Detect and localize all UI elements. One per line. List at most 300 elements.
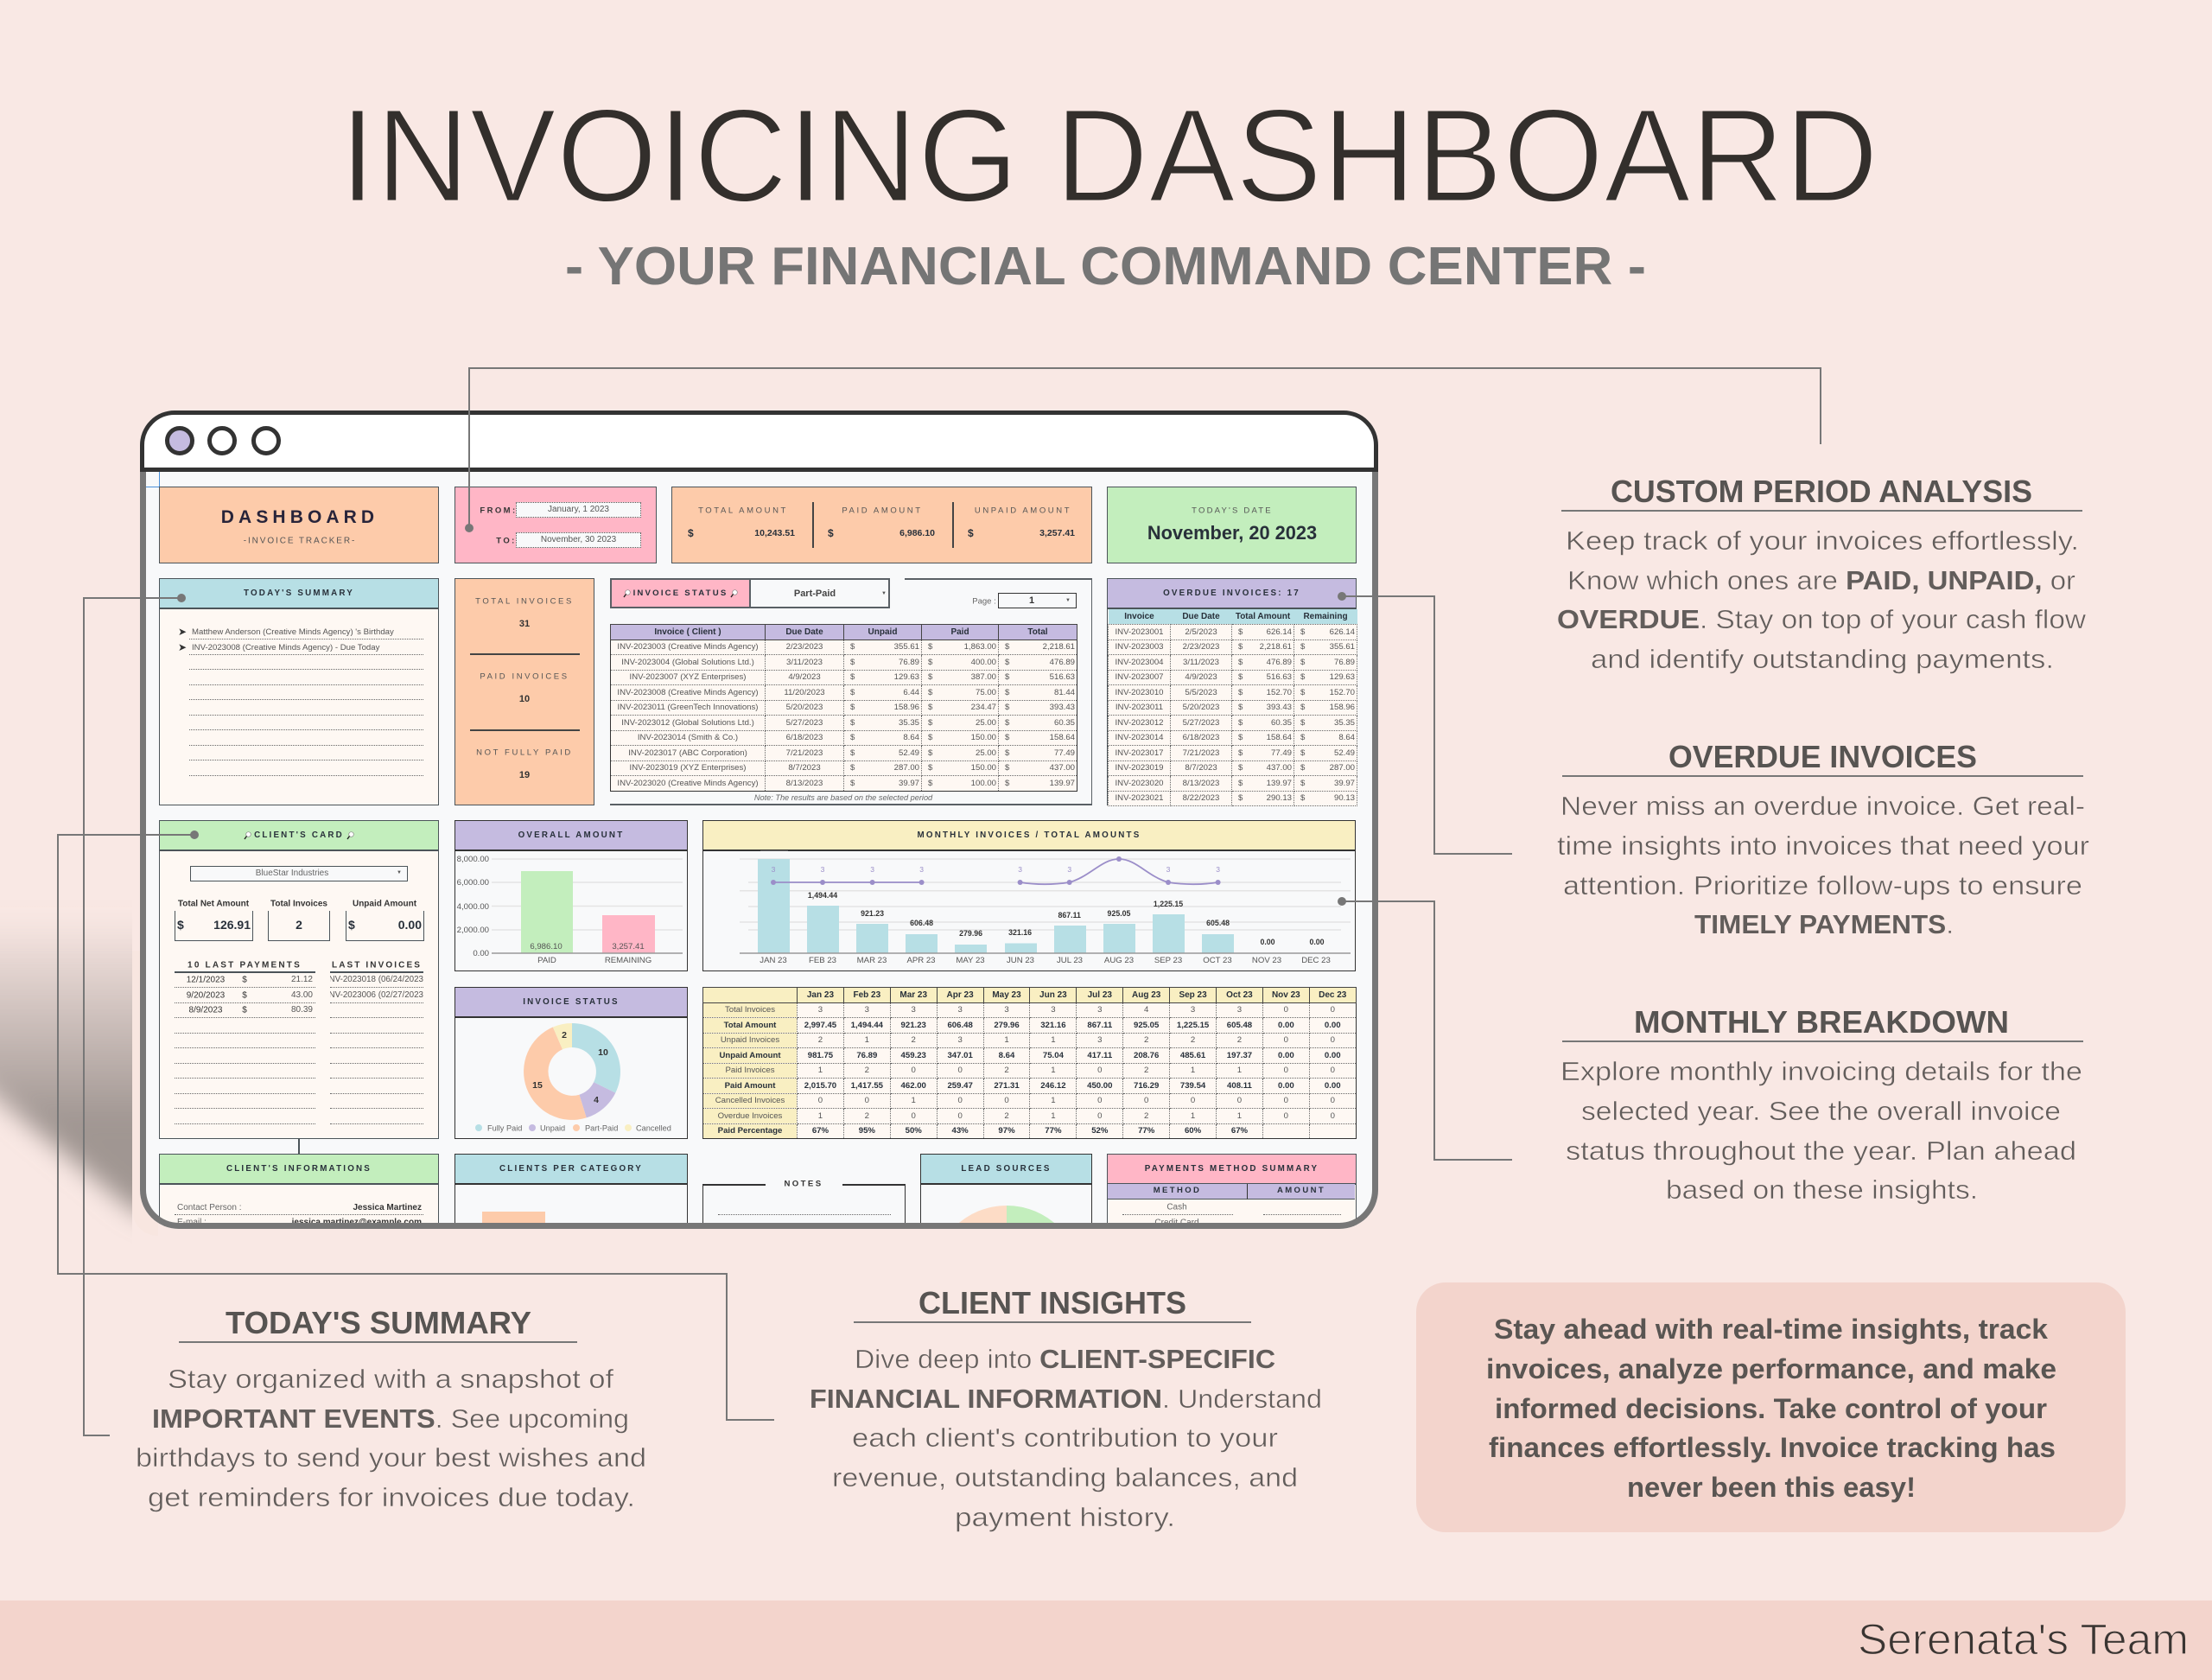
monthly breakdown table: 1 [912,1096,916,1105]
text block: monthly breakdown: Explore monthly invoicing details for the [1560,1056,2082,1086]
overdue table: $ [1300,748,1305,758]
invoice table: 8/7/2023 [788,763,821,773]
panel: dashboard title [159,487,439,563]
overdue header [1108,579,1356,609]
not fully paid: NOT FULLY PAID [476,748,573,757]
invoice table: 387.00 [971,672,996,682]
unpaid value: $ [968,527,974,539]
subtitle: invoice tracker: -INVOICE TRACKER- [244,536,356,546]
monthly breakdown table: 1 [818,1111,823,1121]
text block: monthly breakdown: selected year. See the overall invoice [1581,1096,2061,1126]
invoice table: 39.97 [899,779,919,788]
combo chart: monthly invoices: APR 23 [906,956,935,964]
donut header [455,988,687,1018]
overdue table: $ [1238,763,1243,773]
panel: payments method summary [1107,1154,1357,1249]
text block: client insights: Dive deep into CLIENT-SPECIFIC [855,1344,1275,1374]
monthly breakdown table: 321.16 [1040,1021,1066,1030]
invoice table: 158.64 [1050,733,1075,742]
overdue table: 3/11/2023 [1183,658,1219,667]
overdue table: $ [1300,627,1305,637]
monthly breakdown table: Overdue Invoices [718,1111,782,1121]
overdue table: 60.35 [1271,718,1292,728]
amount column header: AMOUNT [1277,1186,1325,1194]
panel: client's informations [159,1154,439,1249]
total value: 10,243.51 [754,528,795,538]
panel: notes [702,1184,906,1244]
invoice table: INV-2023020 (Creative Minds Agency) [617,779,759,788]
invoice table: $ [928,642,932,652]
text block: overdue invoices [1557,739,2089,939]
monthly breakdown table: 97% [998,1126,1015,1136]
invoice table: 8/13/2023 [786,779,823,788]
summary header: TODAY'S SUMMARY [244,589,354,598]
overall header [455,821,687,851]
callout: finances effortlessly. Invoice tracking has [1489,1432,2056,1463]
monthly breakdown table: 1 [1237,1066,1242,1075]
overdue table: 290.13 [1267,793,1292,803]
combo chart: monthly invoices: 3 [870,864,874,873]
paid value: 6,986.10 [899,528,935,538]
heading: dashboard: DASHBOARD [221,507,378,527]
monthly breakdown table: Oct 23 [1226,990,1253,1000]
footer band [0,1600,2212,1680]
monthly breakdown table: 0.00 [1325,1081,1341,1091]
invoice table: 150.00 [971,763,996,773]
text block: monthly breakdown: MONTHLY BREAKDOWN [1634,1004,2009,1040]
overdue table: $ [1300,658,1305,667]
invoice table: $ [1005,779,1009,788]
amount column header [1248,1184,1355,1200]
summary items [178,626,423,776]
window halo [132,951,158,1236]
monthly breakdown table: 77% [1045,1126,1061,1136]
invoice table: 77.49 [1054,748,1075,758]
total amount: TOTAL AMOUNT [698,506,788,515]
overdue table: $ [1238,658,1243,667]
10 last payments: 9/20/2023 [187,990,225,1001]
donut header: INVOICE STATUS [523,997,620,1007]
invoice table: 11/20/2023 [784,688,825,697]
overdue table: 7/21/2023 [1183,748,1219,758]
overdue table: $ [1238,733,1243,742]
summary items: INV-2023008 (Creative Minds Agency) - Due Today [192,643,379,652]
invoice table: 7/21/2023 [786,748,823,758]
overdue table: Remaining [1303,612,1348,621]
text block: client insights: revenue, outstanding balances, and [832,1462,1298,1492]
total invoices [268,899,330,941]
monthly breakdown table: 3 [1051,1005,1056,1015]
overdue table: $ [1238,779,1243,788]
monthly breakdown table: 1,225.15 [1177,1021,1209,1030]
monthly breakdown table: 1 [865,1035,869,1045]
monthly breakdown table: 0 [1331,1111,1335,1121]
overdue table: 129.63 [1330,672,1355,682]
monthly breakdown table: Jul 23 [1088,990,1112,1000]
monthly breakdown table: 60% [1185,1126,1201,1136]
text block: overdue invoices: OVERDUE INVOICES [1669,739,1977,774]
selected cell marker [145,472,160,487]
invoice table: 2,218.61 [1043,642,1075,652]
invoice table: $ [1005,642,1009,652]
combo chart: monthly invoices: OCT 23 [1203,956,1231,964]
invoice table: 75.00 [976,688,996,697]
combo chart: monthly invoices: 279.96 [959,928,982,937]
monthly breakdown table: Feb 23 [853,990,880,1000]
not fully paid value: 19 [519,770,530,780]
card header: CLIENT'S CARD [254,830,344,840]
invoice table: 35.35 [899,718,919,728]
panel: today's date [1107,487,1357,563]
overdue table: INV-2023014 [1115,733,1163,742]
overdue table: 77.49 [1271,748,1292,758]
overdue table: 393.43 [1267,703,1292,712]
overdue table: 39.97 [1334,779,1355,788]
invoice table: 6.44 [903,688,919,697]
shadow behind the window [0,935,132,1226]
window frame: content border [140,449,1378,1229]
monthly breakdown table: 0 [957,1066,963,1075]
combo chart: monthly invoices: AUG 23 [1103,956,1134,964]
panel: invoice status donut [454,987,688,1139]
combo chart: monthly invoices [740,850,1351,964]
text block: custom period analysis: Know which ones are PAID, UNPAID, or [1567,565,2075,595]
overdue table: $ [1238,748,1243,758]
overdue header: OVERDUE INVOICES: 17 [1163,589,1300,598]
monthly breakdown table: 3 [1097,1005,1102,1015]
page selector: Page : [972,596,996,607]
combo chart: monthly invoices: 606.48 [910,918,933,926]
invoice table: INV-2023003 (Creative Minds Agency) [617,642,759,652]
overdue table: Due Date [1182,612,1220,621]
overdue table: 5/20/2023 [1183,703,1219,712]
overdue table: 8/22/2023 [1183,793,1219,803]
invoice table: $ [1005,748,1009,758]
monthly breakdown table: Nov 23 [1272,990,1300,1000]
lead header: LEAD SOURCES [961,1164,1052,1174]
monthly breakdown table: 2 [1004,1066,1009,1075]
invoice table: $ [850,703,855,712]
contact person row [177,1203,422,1212]
text block: today's summary: TODAY'S SUMMARY [226,1305,531,1340]
10 last payments: 43.00 [291,990,313,1000]
text block: monthly breakdown: based on these insights. [1666,1174,1978,1205]
connector: overdue invoices [1338,593,1512,854]
category header: CLIENTS PER CATEGORY [499,1164,643,1174]
monthly breakdown table: 3 [1004,1005,1009,1015]
e-mail row [177,1218,422,1227]
from date [516,502,641,518]
combo chart: monthly invoices: 3 [820,864,824,873]
bar chart: overall amount: 2,000.00 [456,925,489,935]
combo chart: monthly invoices: 321.16 [1008,928,1032,937]
text block: custom period analysis: Keep track of your invoices effortlessly. [1566,525,2079,556]
donut chart: Fully Paid [487,1123,522,1132]
overdue table: 626.14 [1330,627,1355,637]
monthly breakdown table: 3 [1097,1035,1102,1045]
invoice table: Invoice ( Client ) [654,627,721,637]
monthly breakdown table: 3 [1191,1005,1195,1015]
monthly header: MONTHLY INVOICES / TOTAL AMOUNTS [918,830,1141,840]
monthly breakdown table: 1 [1051,1096,1056,1105]
panel: clients per category [454,1154,688,1249]
monthly breakdown table: 2 [912,1035,916,1045]
notes label: NOTES [784,1179,823,1189]
monthly breakdown table: 2 [1191,1035,1195,1045]
invoice table: $ [928,748,932,758]
invoice table: $ [928,733,932,742]
monthly breakdown table: 0 [1097,1066,1102,1075]
monthly breakdown table: 1,417.55 [851,1081,883,1091]
panel: invoice status list: 1 [1029,595,1034,606]
panel: invoice counts [454,578,594,805]
text block: overdue invoices: Never miss an overdue invoice. Get real- [1560,791,2085,821]
invoice table: 8.64 [903,733,919,742]
overall header: OVERALL AMOUNT [518,830,624,840]
combo chart: monthly invoices: 3 [771,864,775,873]
date value: November, 20 2023 [1147,522,1317,544]
invoice table: $ [1005,718,1009,728]
total net amount [175,899,253,941]
text block: overdue invoices: attention. Prioritize follow-ups to ensure [1563,870,2082,900]
invoice table: INV-2023011 (GreenTech Innovations) [617,703,759,712]
note: Note: The results are based on the selected period [754,793,932,802]
overdue table: $ [1238,703,1243,712]
monthly breakdown table: 0 [1237,1096,1242,1105]
panel: amounts [671,487,1092,563]
overdue table: Total Amount [1236,612,1290,621]
overdue table: INV-2023001 [1115,627,1163,637]
credit card row: Credit Card [1154,1219,1199,1227]
monthly breakdown table: 2 [1144,1111,1148,1121]
callout: informed decisions. Take control of your [1495,1393,2047,1424]
last invoices [330,961,423,1124]
overdue table: 5/27/2023 [1183,718,1219,728]
overdue table: INV-2023021 [1115,793,1163,803]
donut chart: 4 [594,1094,599,1104]
overdue table: 2/5/2023 [1185,627,1217,637]
10 last payments [175,961,315,1124]
monthly breakdown table: 867.11 [1087,1021,1112,1030]
text block: today's summary [136,1305,646,1512]
invoice table: $ [850,779,855,788]
overdue table: 5/5/2023 [1185,688,1217,697]
monthly breakdown table: 459.23 [901,1051,926,1060]
10 last payments: 21.12 [291,975,313,984]
overdue table: INV-2023012 [1115,718,1163,728]
text block: custom period analysis: OVERDUE . Stay on top of your cash flow [1557,604,2087,634]
monthly breakdown table [702,987,1357,1139]
overdue table: $ [1300,672,1305,682]
from date: January, 1 2023 [548,505,609,514]
combo chart: monthly invoices: MAR 23 [856,956,887,964]
overdue table: 35.35 [1334,718,1355,728]
combo chart: monthly invoices: 3 [1166,864,1170,873]
total net amount: Total Net Amount [178,899,249,909]
invoice table: 76.89 [899,658,919,667]
panel: monthly invoices chart [702,820,1356,971]
overdue table: 90.13 [1334,793,1355,803]
monthly breakdown table: 0 [1284,1096,1288,1105]
monthly breakdown table: Aug 23 [1132,990,1160,1000]
combo chart: monthly invoices: 0.00 [1260,937,1274,945]
monthly breakdown table: 246.12 [1040,1081,1066,1091]
overdue table: INV-2023010 [1115,688,1163,697]
bar chart: overall amount: 6,000.00 [456,878,489,887]
overdue table: $ [1300,688,1305,697]
monthly breakdown table: Jun 23 [1039,990,1067,1000]
monthly breakdown table: Paid Invoices [725,1066,775,1075]
monthly breakdown table: 279.96 [994,1021,1020,1030]
bar chart: overall amount: 4,000.00 [456,902,489,911]
unpaid value: 3,257.41 [1039,528,1075,538]
invoice table: Due Date [785,627,823,637]
e-mail row: E-mail : [177,1218,207,1227]
invoice table: INV-2023017 (ABC Corporation) [628,748,747,758]
overdue table: $ [1300,642,1305,652]
combo chart: monthly invoices: 1,225.15 [1153,899,1183,907]
overdue table: 516.63 [1267,672,1292,682]
overdue table: INV-2023020 [1115,779,1163,788]
bar chart: overall amount [456,854,683,964]
invoice table: Unpaid [868,627,897,637]
monthly breakdown table: 67% [812,1126,829,1136]
10 last payments: 12/1/2023 [187,975,225,985]
monthly breakdown table: 0 [1331,1035,1335,1045]
monthly breakdown table: 0.00 [1278,1021,1294,1030]
text block: today's summary: IMPORTANT EVENTS . See upcoming [152,1403,629,1434]
combo chart: monthly invoices: 0.00 [1309,937,1324,945]
combo chart: monthly invoices: 867.11 [1058,911,1081,920]
text block: today's summary: get reminders for invoices due today. [148,1482,635,1512]
monthly breakdown table: 485.61 [1180,1051,1205,1060]
overdue table: $ [1300,763,1305,773]
client dropdown: ▼ [397,870,402,875]
connector: client insights [58,831,774,1420]
text block: custom period analysis: and identify outstanding payments. [1591,644,2054,674]
invoice table: 1,863.00 [964,642,996,652]
monthly breakdown table: 0 [912,1111,916,1121]
window button 3 [251,426,281,455]
donut chart: 2 [562,1030,567,1040]
10 last payments: $ [242,990,247,1001]
bar chart: overall amount: REMAINING [604,956,652,964]
overdue table: 76.89 [1334,658,1355,667]
window frame: title bar [140,410,1378,472]
monthly breakdown table: May 23 [992,990,1021,1000]
monthly breakdown table: 208.76 [1134,1051,1159,1060]
monthly breakdown table: 197.37 [1227,1051,1252,1060]
overdue table: $ [1300,718,1305,728]
invoice table: $ [1005,703,1009,712]
invoice table: 52.49 [899,748,919,758]
invoice table: 129.63 [894,672,919,682]
donut chart: 15 [532,1080,542,1091]
invoice table: $ [850,658,855,667]
overdue table: 139.97 [1267,779,1292,788]
text block: monthly breakdown [1560,1004,2083,1205]
client dropdown: BlueStar Industries [256,869,328,878]
monthly breakdown table: Cancelled Invoices [715,1096,785,1105]
method column header: METHOD [1154,1186,1201,1194]
overdue table: $ [1300,793,1305,803]
to label: TO: [496,536,517,546]
overdue table: INV-2023011 [1116,703,1163,712]
invoice table: 25.00 [976,748,996,758]
donut chart: 10 [598,1047,607,1058]
invoice status selector: INVOICE STATUS [633,589,728,598]
invoice table: 400.00 [971,658,996,667]
monthly breakdown table: 3 [1237,1005,1242,1015]
monthly header [703,821,1355,851]
monthly breakdown table: 0 [1004,1096,1009,1105]
overdue table: INV-2023017 [1115,748,1163,758]
paid invoices value: 10 [519,694,530,704]
invoice table: 81.44 [1054,688,1075,697]
invoice table: $ [850,733,855,742]
monthly breakdown table: 605.48 [1227,1021,1252,1030]
overdue table: 355.61 [1330,642,1355,652]
invoice table: $ [1005,658,1009,667]
monthly breakdown table: 1 [1051,1035,1056,1045]
combo chart: monthly invoices: 605.48 [1206,918,1230,926]
dashboard window [140,410,1378,1229]
overdue table: 158.96 [1330,703,1355,712]
monthly breakdown table: 417.11 [1087,1051,1112,1060]
invoice table: 25.00 [976,718,996,728]
monthly breakdown table: Dec 23 [1319,990,1346,1000]
invoice status selector: ▼ [881,591,887,596]
monthly breakdown table: 0 [1097,1096,1102,1105]
overdue table: $ [1300,779,1305,788]
text block: custom period analysis [1557,474,2087,674]
invoice table: $ [850,688,855,697]
paid invoices: PAID INVOICES [480,672,569,681]
summary items: ➤ [178,626,187,638]
window button 1 [165,426,194,455]
overdue table: 4/9/2023 [1185,672,1217,682]
panel: lead sources [920,1154,1092,1249]
overdue table: 8.64 [1338,733,1355,742]
monthly breakdown table: 95% [859,1126,875,1136]
invoice table: 516.63 [1050,672,1075,682]
monthly breakdown table: Paid Amount [725,1081,775,1091]
overdue table: $ [1238,718,1243,728]
text block: client insights: FINANCIAL INFORMATION . Understand [810,1384,1322,1414]
overdue table: INV-2023003 [1115,642,1163,652]
overdue table: 6/18/2023 [1183,733,1219,742]
monthly breakdown table: 2 [1004,1111,1009,1121]
monthly breakdown table: 739.54 [1180,1081,1205,1091]
overdue table: 2/23/2023 [1183,642,1219,652]
monthly breakdown table: 1 [1191,1066,1195,1075]
from label: FROM: [480,506,518,515]
monthly breakdown table: 0 [1331,1005,1335,1015]
invoice table: 4/9/2023 [788,672,821,682]
invoice table: 150.00 [971,733,996,742]
overdue table: 8/7/2023 [1185,763,1217,773]
invoice table: $ [928,779,932,788]
invoice status selector: Part-Paid [794,589,836,599]
panel: invoice status list [610,578,1092,805]
monthly breakdown table: 271.31 [994,1081,1020,1091]
invoice table: 2/23/2023 [786,642,823,652]
combo chart: monthly invoices: 3 [1018,864,1022,873]
text block: client insights: CLIENT INSIGHTS [918,1285,1186,1320]
overdue table: Invoice [1124,612,1154,621]
payments header: PAYMENTS METHOD SUMMARY [1145,1164,1319,1174]
monthly breakdown table: 0 [1284,1005,1288,1015]
